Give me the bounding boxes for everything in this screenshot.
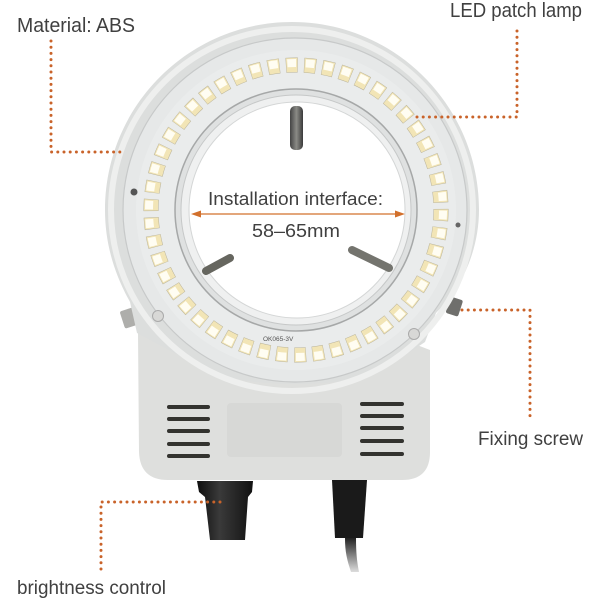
callout line: brightness bbox=[101, 502, 220, 575]
small screws and holes bbox=[130, 188, 460, 340]
callout line: fixing screw bbox=[462, 310, 530, 420]
power cable bbox=[345, 538, 359, 572]
callout line: LED bbox=[412, 31, 517, 117]
right vent slots bbox=[362, 404, 402, 454]
power plug bbox=[332, 480, 367, 538]
icon: fixing screw knob right bbox=[446, 297, 463, 317]
icon: fixing screw knob left bbox=[120, 307, 139, 329]
text: interface size: 58–65mm bbox=[252, 221, 340, 241]
lamp control body bbox=[138, 333, 430, 480]
inner ring and clear opening bbox=[175, 89, 417, 331]
model marking: OK065-3V bbox=[263, 336, 294, 343]
brightness control knob bbox=[197, 481, 253, 540]
label: brightness: brightness control bbox=[17, 578, 166, 599]
label: fixing screw: Fixing screw bbox=[478, 429, 583, 450]
label: material: Material: ABS bbox=[17, 15, 135, 37]
text: installation interface: Installation interface: bbox=[208, 189, 383, 209]
ring lamp housing bbox=[105, 22, 479, 391]
mounting bolts bbox=[206, 106, 389, 271]
label plate bbox=[227, 403, 342, 457]
left vent slots bbox=[169, 407, 208, 456]
callout line: material bbox=[51, 41, 120, 152]
arrow: interface diameter bbox=[191, 210, 405, 218]
label: LED: LED patch lamp bbox=[450, 0, 582, 22]
LED patch lamps bbox=[140, 54, 452, 366]
